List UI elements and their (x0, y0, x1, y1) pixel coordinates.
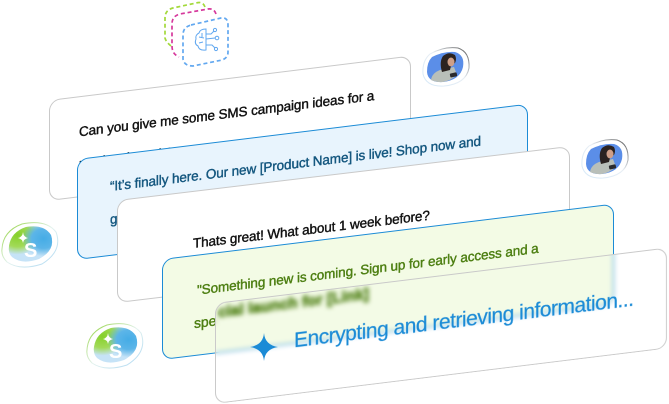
icon: S logo lower (86, 323, 144, 369)
panel: AI answer card blue (77, 104, 528, 260)
answer text line two, blurred behind glass: cial launch for [Link] (218, 286, 369, 321)
question text line two: product launch? (79, 145, 173, 171)
panel: user question card (49, 56, 411, 201)
panel: AI answer card green (162, 204, 614, 360)
icon: sparkle (86, 323, 278, 364)
icon: S logo left (1, 222, 278, 364)
answer text line two start: spe (194, 312, 216, 331)
answer text: “It’s finally here. Our new [Product Name] is live! Shop now and (110, 133, 481, 194)
icon: avatar right (582, 139, 628, 178)
answer text: "Something new is coming. Sign up for early access and a (197, 241, 539, 298)
follow-up text: Thats great! What about 1 week before? (193, 208, 430, 251)
answer text line two: get yours today! (110, 200, 204, 227)
icon: S logo lower: S (109, 341, 122, 363)
status text: Encrypting and retrieving information... (294, 288, 634, 352)
icon: S logo left: S (24, 240, 37, 262)
panel: follow-up question card (117, 146, 570, 303)
question text: Can you give me some SMS campaign ideas for a (79, 88, 374, 139)
panel: frosted encrypting card (215, 248, 667, 404)
icon: avatar top (422, 47, 470, 86)
